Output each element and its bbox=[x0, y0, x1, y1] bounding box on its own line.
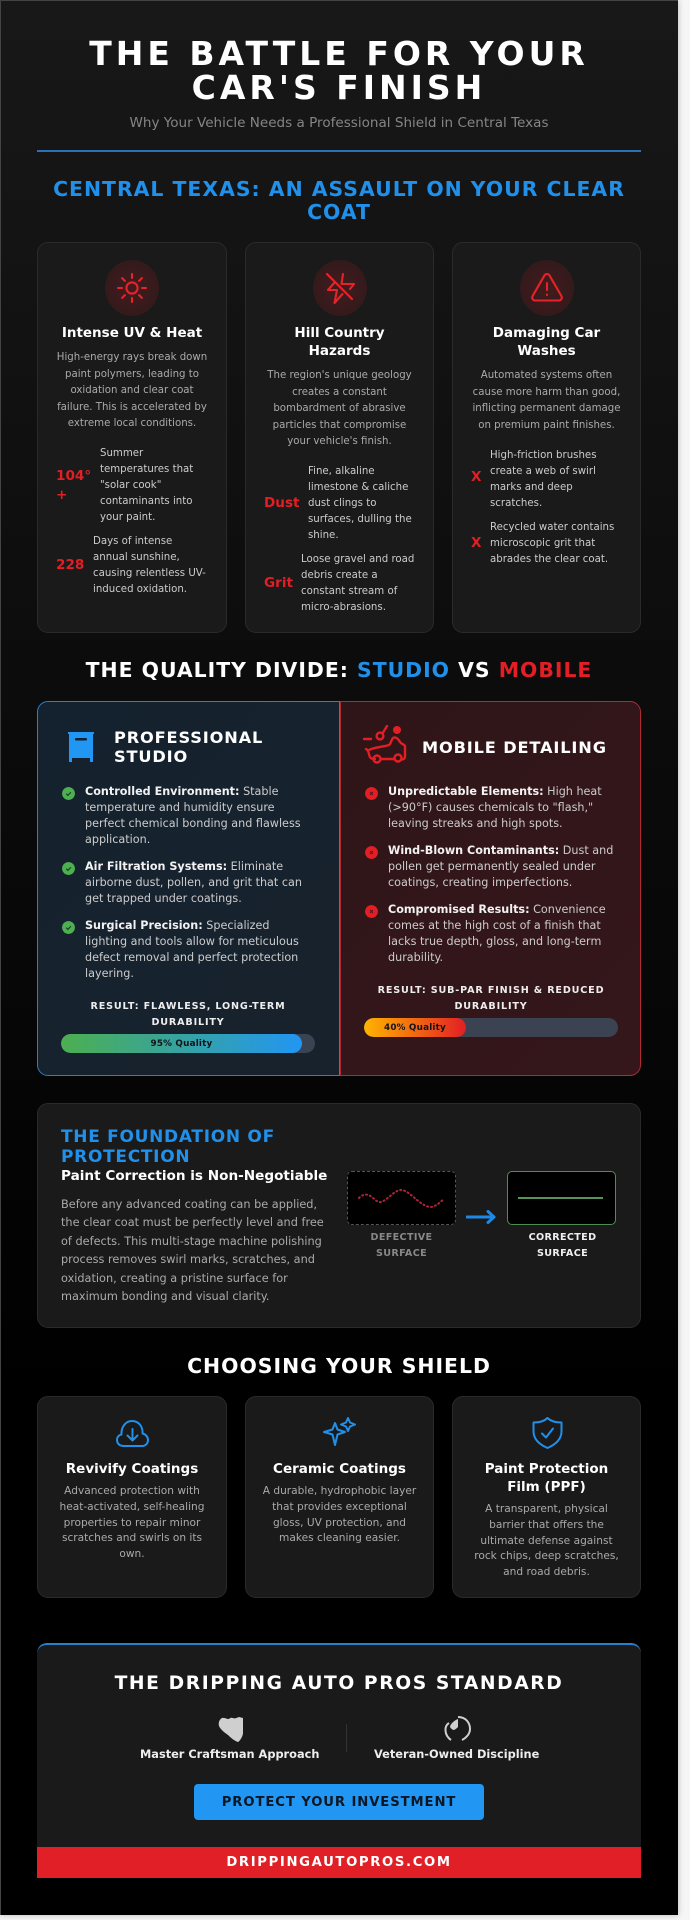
card description: on premium paint finishes. bbox=[478, 420, 615, 430]
item text: perfect chemical bonding and flawless bbox=[85, 817, 301, 830]
panel: ceramic coatings bbox=[245, 1396, 434, 1598]
icon: craftsman shield bbox=[218, 1717, 244, 1742]
card description: cause more harm than good, bbox=[473, 386, 620, 398]
card description: Advanced protection with bbox=[64, 1485, 200, 1497]
panel heading: MOBILE DETAILING bbox=[422, 738, 607, 757]
item text: layering. bbox=[85, 967, 134, 980]
card title: Revivify Coatings bbox=[66, 1461, 198, 1477]
card title: Paint Protection bbox=[485, 1461, 608, 1477]
stat text: shine. bbox=[308, 530, 339, 541]
stat text: micro-abrasions. bbox=[301, 602, 386, 613]
stat text: scratches. bbox=[490, 498, 542, 509]
card title: Hazards bbox=[309, 343, 370, 359]
panel subheading: Paint Correction is Non-Negotiable bbox=[61, 1168, 327, 1184]
icon: cross bbox=[365, 787, 378, 800]
stat text: contaminants into bbox=[100, 496, 192, 507]
label: DEFECTIVE bbox=[371, 1232, 432, 1243]
card description: properties to repair minor bbox=[64, 1517, 200, 1529]
stat: dust: Dust bbox=[264, 495, 300, 511]
card description: A durable, hydrophobic layer bbox=[263, 1485, 416, 1497]
label: CORRECTED bbox=[529, 1232, 596, 1243]
stat text: Fine, alkaline bbox=[308, 466, 375, 477]
result label: DURABILITY bbox=[454, 1001, 528, 1012]
heading: central texas: COAT bbox=[307, 200, 371, 224]
card description: A transparent, physical bbox=[485, 1503, 608, 1515]
icon: cloud download bbox=[116, 1420, 149, 1447]
stat text: surfaces, dulling the bbox=[308, 514, 412, 525]
panel: revivify coatings bbox=[37, 1396, 227, 1598]
item text bbox=[85, 785, 301, 846]
item text: temperature and humidity ensure bbox=[85, 801, 275, 814]
title: THE BATTLE FOR YOUR bbox=[89, 34, 589, 73]
card description: bombardment of abrasive bbox=[273, 403, 406, 414]
quality bar: 95 percent: 95% Quality bbox=[151, 1039, 212, 1049]
card description: The region's unique geology bbox=[267, 370, 412, 381]
item text: application. bbox=[85, 833, 150, 846]
cross item: wind-blown contaminants bbox=[365, 844, 613, 889]
card description: High-energy rays break down bbox=[57, 352, 207, 363]
button bbox=[194, 1784, 484, 1820]
panel: hill country hazards bbox=[245, 242, 434, 633]
item text: lighting and tools allow for meticulous bbox=[85, 935, 299, 948]
card title: Intense UV & Heat bbox=[62, 325, 202, 341]
card description: oxidation and clear coat bbox=[70, 385, 194, 396]
item text: Controlled Environment: Stable bbox=[85, 785, 279, 798]
item text bbox=[85, 919, 299, 980]
stat: 228 days: 228 bbox=[56, 557, 84, 573]
cross item: unpredictable elements bbox=[365, 785, 602, 830]
card description: and road debris. bbox=[503, 1566, 590, 1578]
stat text: limestone & caliche bbox=[308, 482, 408, 493]
item text: leaving streaks and high spots. bbox=[388, 817, 563, 830]
item text: (>90°F) causes chemicals to "flash," bbox=[388, 801, 593, 814]
item text: Unpredictable Elements: High heat bbox=[388, 785, 602, 798]
stat text: "solar cook" bbox=[100, 480, 161, 491]
label bbox=[508, 1230, 617, 1262]
check item: surgical precision bbox=[62, 919, 299, 980]
card description: rock chips, deep scratches, bbox=[474, 1550, 619, 1562]
website bar bbox=[37, 1847, 641, 1878]
stat text bbox=[490, 450, 597, 509]
check item: controlled environment bbox=[62, 785, 301, 846]
result label bbox=[90, 1001, 286, 1028]
panel heading: THE FOUNDATION OF bbox=[61, 1127, 275, 1147]
label: SURFACE bbox=[376, 1248, 427, 1259]
card description: gloss, UV protection, and bbox=[273, 1517, 406, 1529]
item text bbox=[388, 785, 602, 830]
card description: own. bbox=[119, 1548, 145, 1560]
label: SURFACE bbox=[537, 1248, 588, 1259]
label: Veteran-Owned Discipline bbox=[374, 1747, 539, 1761]
panel text: the clear coat must be perfectly level and free bbox=[61, 1216, 324, 1229]
stat text: marks and deep bbox=[490, 482, 573, 493]
card description: extreme local conditions. bbox=[68, 418, 196, 429]
diagram: defective surface bbox=[347, 1171, 456, 1225]
subtitle: Why Your Vehicle Needs a Professional Shield in Central Texas bbox=[129, 115, 549, 131]
item text: pollen get permanently sealed under bbox=[388, 860, 595, 873]
title: CAR'S FINISH bbox=[192, 68, 486, 107]
card title bbox=[294, 325, 385, 359]
panel heading: PROTECTION bbox=[61, 1147, 190, 1167]
title bbox=[89, 34, 589, 107]
stat text: temperatures that bbox=[100, 464, 193, 475]
stat: x mark: X bbox=[471, 469, 481, 485]
card description: ultimate defense against bbox=[480, 1535, 613, 1547]
panel heading: PROFESSIONAL bbox=[114, 728, 263, 746]
panel: intense UV and heat bbox=[37, 242, 227, 633]
stat text: High-friction brushes bbox=[490, 450, 597, 461]
stat text: abrades the clear coat. bbox=[490, 554, 608, 565]
panel: mobile detailing bbox=[340, 701, 641, 1076]
card description: paint polymers, leading to bbox=[65, 368, 199, 380]
item text: airborne dust, pollen, and grit that can bbox=[85, 876, 302, 889]
website bar: DRIPPINGAUTOPROS.COM bbox=[226, 1855, 452, 1870]
card description: inflicting permanent damage bbox=[472, 403, 621, 414]
stat text bbox=[93, 536, 206, 595]
card title: Damaging Car bbox=[493, 325, 600, 341]
panel heading bbox=[61, 1127, 275, 1167]
icon: check bbox=[62, 862, 75, 875]
card title: Film (PPF) bbox=[507, 1479, 586, 1495]
stat text: dust clings to bbox=[308, 498, 376, 509]
panel heading: STUDIO bbox=[114, 747, 188, 766]
item text bbox=[85, 860, 302, 905]
item text: comes at the high cost of a finish that bbox=[388, 919, 601, 932]
stat: 104 degrees: 104° bbox=[56, 468, 91, 484]
stat text bbox=[490, 522, 614, 565]
heading: central texas bbox=[53, 177, 625, 224]
stat text bbox=[301, 554, 414, 613]
card description bbox=[38, 1484, 226, 1563]
panel text: Before any advanced coating can be applied, bbox=[61, 1198, 317, 1211]
panel: foundation of protection bbox=[37, 1103, 641, 1328]
item text: Air Filtration Systems: Eliminate bbox=[85, 860, 283, 873]
defect wave bbox=[348, 1172, 455, 1224]
card description: makes cleaning easier. bbox=[279, 1532, 400, 1544]
result label: RESULT: SUB-PAR FINISH & REDUCED bbox=[378, 985, 604, 996]
card description: your vehicle's finish. bbox=[287, 436, 392, 447]
icon: cross bbox=[365, 905, 378, 918]
stat text: induced oxidation. bbox=[93, 584, 187, 595]
heading: quality divide: THE QUALITY DIVIDE: STUDIO VS MOBILE bbox=[86, 658, 592, 682]
card description: that provides exceptional bbox=[272, 1501, 407, 1513]
card description bbox=[246, 1484, 433, 1547]
card title: Hill Country bbox=[294, 325, 385, 341]
item text: Surgical Precision: Specialized bbox=[85, 919, 270, 932]
stat text: Days of intense bbox=[93, 536, 172, 547]
quality bar: 95 percent bbox=[61, 1034, 315, 1053]
stat text: Summer bbox=[100, 448, 143, 459]
quality bar: 40 percent bbox=[364, 1018, 618, 1037]
stat text: causing relentless UV- bbox=[93, 568, 206, 579]
item text bbox=[388, 844, 613, 889]
heading: choosing your shield: CHOOSING YOUR SHIELD bbox=[187, 1354, 491, 1378]
item text: Wind-Blown Contaminants: Dust and bbox=[388, 844, 613, 857]
stat text: Recycled water contains bbox=[490, 522, 614, 533]
item text: Compromised Results: Convenience bbox=[388, 903, 606, 916]
diagram: corrected surface bbox=[506, 1171, 616, 1225]
stat text: annual sunshine, bbox=[93, 552, 180, 563]
result label: DURABILITY bbox=[151, 1017, 225, 1028]
card description: failure. This is accelerated by bbox=[57, 402, 207, 412]
item text: get trapped under coatings. bbox=[85, 892, 242, 905]
panel: damaging car washes bbox=[452, 242, 641, 633]
card description: creates a constant bbox=[292, 386, 387, 398]
stat: 104 degrees bbox=[56, 468, 91, 503]
card description: Automated systems often bbox=[481, 370, 612, 381]
result label bbox=[378, 985, 604, 1012]
item text bbox=[388, 903, 606, 964]
icon: warning triangle bbox=[520, 260, 574, 316]
card title bbox=[453, 1460, 640, 1496]
cross item: compromised results bbox=[365, 903, 606, 964]
icon: cross bbox=[365, 846, 378, 859]
item text: durability. bbox=[388, 951, 443, 964]
stat: grit: Grit bbox=[264, 575, 293, 591]
icon: veteran emblem bbox=[443, 1716, 471, 1742]
label: Master Craftsman Approach bbox=[140, 1747, 319, 1761]
icon: studio cabinet bbox=[68, 732, 94, 762]
card description bbox=[472, 370, 621, 430]
panel text bbox=[61, 1198, 324, 1303]
stat: x mark: X bbox=[471, 535, 481, 551]
arrow bbox=[466, 1209, 496, 1225]
icon: broken bolt bbox=[313, 260, 367, 316]
icon: mobile car service bbox=[363, 725, 406, 764]
card description: scratches and swirls on its bbox=[62, 1532, 202, 1544]
panel: professional studio bbox=[37, 701, 340, 1076]
icon: sparkles bbox=[323, 1417, 357, 1446]
stat text bbox=[100, 448, 193, 523]
stat text: constant stream of bbox=[301, 586, 397, 597]
panel heading bbox=[114, 728, 263, 766]
item text: defect removal and perfect protection bbox=[85, 951, 298, 964]
card title: Ceramic Coatings bbox=[273, 1461, 406, 1477]
card description: particles that compromise bbox=[273, 420, 406, 430]
panel: paint protection film bbox=[452, 1396, 641, 1598]
stat text: create a web of swirl bbox=[490, 466, 596, 477]
panel text: maximum bonding and visual clarity. bbox=[61, 1290, 270, 1303]
item text: coatings, creating imperfections. bbox=[388, 876, 572, 889]
card description bbox=[267, 370, 412, 447]
label bbox=[347, 1230, 456, 1262]
stat text: debris create a bbox=[301, 570, 378, 581]
card description bbox=[57, 352, 207, 429]
stat: 104 degrees: + bbox=[56, 487, 67, 503]
panel text: oxidation, creating a pristine surface for bbox=[61, 1272, 288, 1285]
level line bbox=[518, 1196, 602, 1198]
result label: RESULT: FLAWLESS, LONG-TERM bbox=[90, 1001, 286, 1012]
panel: dripping auto pros standard bbox=[37, 1643, 641, 1878]
card description: barrier that offers the bbox=[489, 1519, 604, 1531]
stat text bbox=[308, 466, 412, 541]
card description: heat-activated, self-healing bbox=[59, 1501, 204, 1513]
card description bbox=[453, 1502, 640, 1581]
quality bar: 40 percent: 40% Quality bbox=[384, 1023, 446, 1033]
check item: air filtration bbox=[62, 860, 302, 905]
panel text: process removes swirl marks, scratches, and bbox=[61, 1253, 315, 1266]
icon: check bbox=[62, 921, 75, 934]
icon: shield check bbox=[532, 1417, 563, 1449]
panel text: of defects. This multi-stage machine polishing bbox=[61, 1235, 322, 1248]
item text: lacks true depth, gloss, and long-term bbox=[388, 935, 601, 948]
stat text: microscopic grit that bbox=[490, 538, 595, 549]
icon: sun bbox=[105, 260, 159, 316]
card title bbox=[493, 325, 600, 359]
button: PROTECT YOUR INVESTMENT bbox=[222, 1795, 456, 1810]
stat text: your paint. bbox=[100, 512, 155, 523]
stat text: Loose gravel and road bbox=[301, 554, 414, 565]
panel heading: THE DRIPPING AUTO PROS STANDARD bbox=[115, 1673, 563, 1694]
heading: central texas: CENTRAL TEXAS: AN ASSAULT ON YOUR CLEAR bbox=[53, 177, 625, 201]
card title: Washes bbox=[517, 343, 576, 359]
icon: check bbox=[62, 787, 75, 800]
